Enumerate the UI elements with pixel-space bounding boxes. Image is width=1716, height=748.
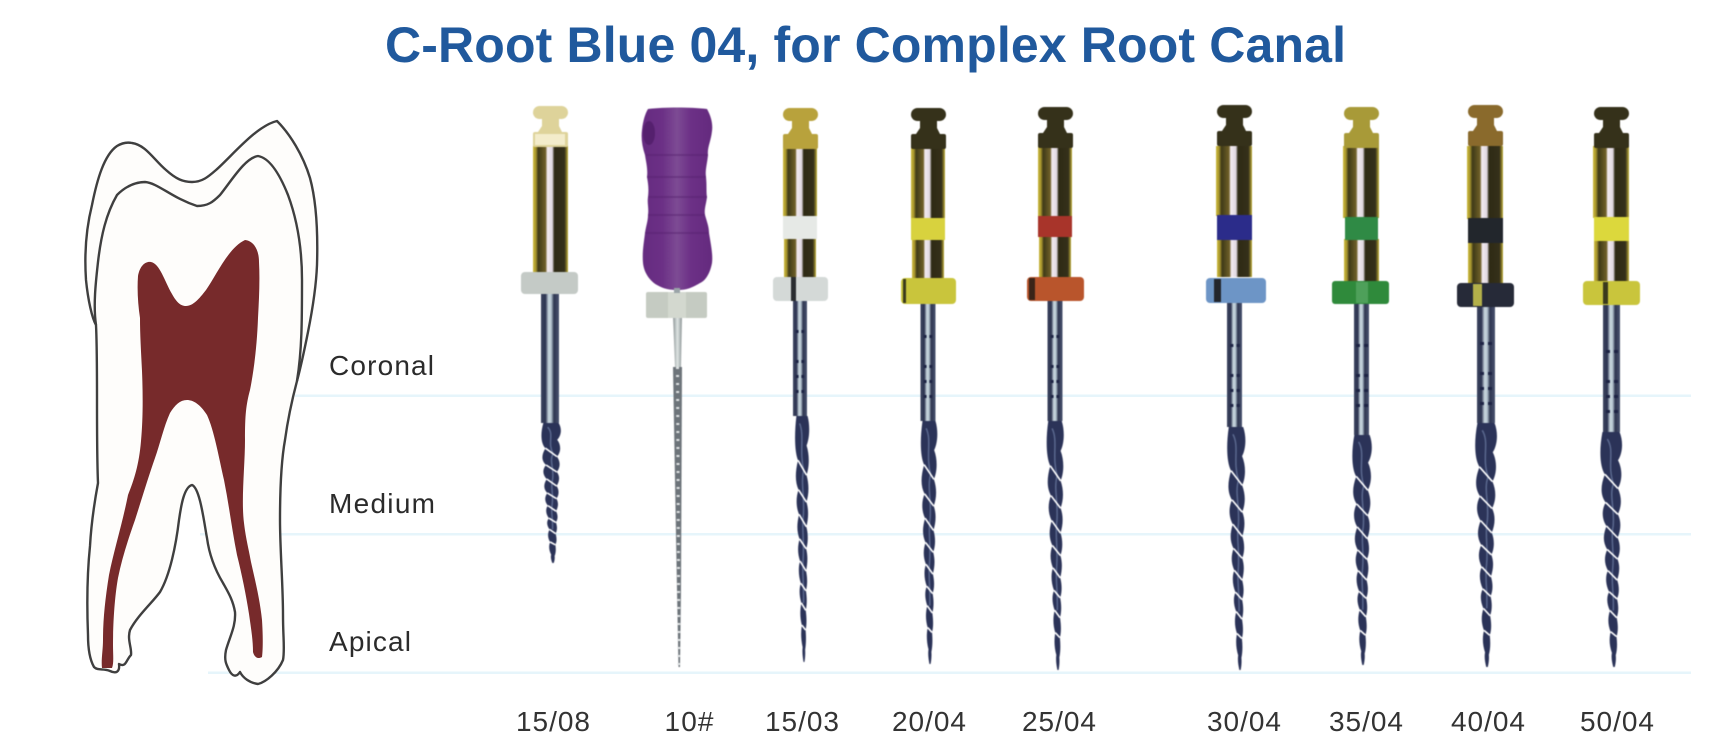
pulp and canals: [102, 240, 263, 668]
size label 10#: 10#: [664, 706, 714, 737]
reference line: medium: [200, 533, 1691, 536]
size label 50/04: 50/04: [1580, 706, 1654, 737]
file 25/04: [1027, 107, 1084, 670]
label: Medium: Medium: [329, 488, 435, 519]
tooth outline: [85, 121, 317, 684]
file 30/04: [1206, 105, 1266, 670]
label: Coronal: Coronal: [329, 350, 434, 381]
size label 15/08: 15/08: [516, 706, 590, 737]
file 20/04: [901, 108, 956, 664]
reference line: coronal: [295, 394, 1691, 397]
size label 35/04: 35/04: [1329, 706, 1403, 737]
purple handle: [642, 108, 712, 290]
label: Apical: Apical: [329, 626, 411, 657]
title: C-Root Blue 04, for Complex Root Canal: [385, 17, 1346, 73]
file 15/03: [773, 108, 828, 662]
file 35/04: [1332, 107, 1389, 665]
file 15/08: [521, 106, 578, 563]
enamel boundary: [95, 156, 302, 381]
stopper: [646, 292, 707, 318]
file 10# with purple handle: [642, 108, 712, 667]
size label 40/04: 40/04: [1451, 706, 1525, 737]
reference line: apical: [208, 672, 1691, 674]
file 40/04: [1457, 105, 1514, 667]
size label 20/04: 20/04: [892, 706, 966, 737]
size label 15/03: 15/03: [765, 706, 839, 737]
file 50/04: [1583, 107, 1640, 667]
tooth diagram: [85, 121, 317, 684]
size label 30/04: 30/04: [1207, 706, 1281, 737]
size label 25/04: 25/04: [1022, 706, 1096, 737]
